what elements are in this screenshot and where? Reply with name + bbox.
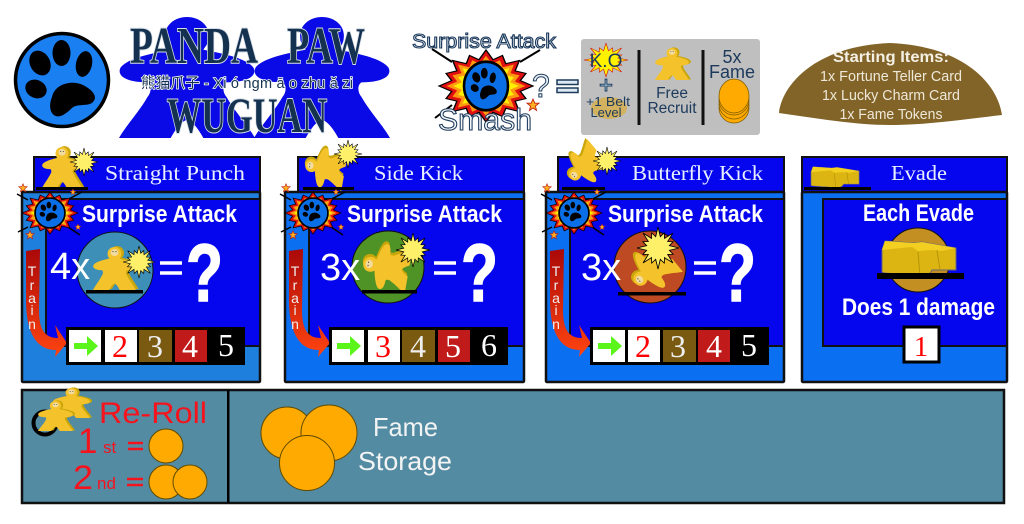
- second reroll: nd: [97, 474, 116, 493]
- paw logo: [16, 34, 108, 126]
- train track: 4: [706, 328, 722, 364]
- attack formula: 3x: [320, 247, 360, 289]
- rewards panel: [581, 39, 760, 135]
- attack formula: 4x: [50, 246, 90, 288]
- surprise icon: [17, 184, 82, 239]
- each evade heading: Each Evade: [863, 200, 974, 227]
- surprise icon: [541, 184, 606, 239]
- ko burst: [584, 43, 628, 77]
- surprise heading: Surprise Attack: [608, 201, 764, 228]
- train track: [66, 327, 245, 365]
- train track: 5: [218, 327, 234, 363]
- attack formula: ?: [461, 228, 498, 319]
- starting items panel: 1x Lucky Charm Card: [822, 87, 960, 104]
- surprise icon: [280, 184, 345, 239]
- train track: 6: [481, 327, 497, 363]
- train track: 3: [375, 328, 391, 364]
- attack formula: [581, 227, 756, 319]
- evade icon: [877, 228, 964, 292]
- free recruit: [647, 47, 697, 117]
- small star: [527, 99, 539, 110]
- fame storage label: Storage: [358, 446, 452, 476]
- heading: Wuguan: WUGUAN: [167, 87, 327, 143]
- plus sign: +: [599, 72, 613, 99]
- attack formula: 3x: [581, 247, 621, 289]
- reroll heading: Re-Roll: [99, 397, 207, 430]
- surprise heading: Surprise Attack: [82, 201, 238, 228]
- attack formula: ?: [186, 228, 223, 319]
- five fame: [709, 47, 755, 123]
- equals sign: [557, 80, 578, 92]
- damage box: [904, 327, 939, 363]
- question mark: ?: [532, 68, 550, 104]
- train track: 2: [635, 328, 651, 364]
- header flat meeple: [804, 167, 871, 190]
- panel: straight punch: [17, 146, 260, 382]
- first reroll: 1: [78, 422, 97, 461]
- train arrow: [289, 249, 330, 357]
- starting items panel: 1x Fame Tokens: [840, 106, 942, 123]
- smash label: Smash: [438, 102, 532, 137]
- card title: Evade: [891, 161, 947, 185]
- train arrow: [26, 249, 67, 357]
- train track: 5: [741, 327, 757, 363]
- header meeple: [301, 140, 362, 191]
- smash burst icon: [432, 49, 540, 122]
- card title: Straight Punch: [105, 161, 246, 185]
- belt level label: [586, 94, 630, 120]
- second reroll: 2: [73, 459, 93, 497]
- header meeple: [36, 146, 98, 190]
- surprise attack smash logo: [412, 31, 578, 137]
- panel: evade: [802, 157, 1007, 382]
- belt level label: +1 Belt: [586, 94, 630, 109]
- fame storage label: [358, 412, 452, 476]
- attack formula: [320, 228, 498, 319]
- heading: Panda Paw: PANDA: [130, 18, 258, 75]
- damage box: 1: [914, 331, 928, 363]
- train track: [590, 327, 769, 365]
- free recruit: Free: [656, 85, 688, 102]
- first reroll: [78, 422, 183, 463]
- fame coins: [261, 405, 357, 490]
- train track: 2: [112, 328, 128, 364]
- train track: 4: [182, 328, 198, 364]
- train track: [329, 327, 508, 365]
- attack formula: ?: [719, 228, 756, 319]
- blue meeple backdrop: [119, 17, 390, 138]
- ko burst: K.O: [590, 51, 622, 72]
- train track: 5: [445, 328, 461, 364]
- starting items panel: 1x Fortune Teller Card: [820, 68, 962, 85]
- heading: Panda Paw: PAW: [287, 18, 365, 75]
- title: Panda Paw Wuguan: [119, 17, 390, 143]
- first reroll: st: [103, 438, 116, 457]
- train track: 4: [410, 328, 426, 364]
- surprise heading: Surprise Attack: [347, 201, 503, 228]
- card title: Side Kick: [374, 161, 464, 185]
- starting items panel: Starting Items:: [833, 49, 949, 66]
- attack formula: [50, 228, 223, 319]
- panel: bottom bar: [22, 387, 1004, 503]
- five fame: 5x: [722, 47, 742, 67]
- card title: Butterfly Kick: [632, 161, 764, 185]
- fame storage label: Fame: [373, 412, 438, 442]
- starting items panel: [779, 43, 1002, 125]
- train arrow: [550, 249, 591, 357]
- five fame: Fame: [709, 62, 755, 82]
- train track: 3: [147, 328, 163, 364]
- header meeple: [556, 137, 621, 193]
- damage text: Does 1 damage: [842, 294, 995, 321]
- surprise attack label: Surprise Attack: [412, 31, 557, 53]
- train track: 3: [670, 328, 686, 364]
- second reroll: [73, 459, 207, 499]
- belt level label: Level: [590, 105, 622, 120]
- subtitle chinese and pinyin: 熊猫爪子 - Xi ó ngm ā o zhu ă zi: [141, 75, 353, 92]
- panel: side kick: [280, 140, 524, 382]
- panel: butterfly kick: [541, 137, 784, 382]
- free recruit: Recruit: [647, 100, 697, 117]
- reroll icon: [34, 387, 92, 434]
